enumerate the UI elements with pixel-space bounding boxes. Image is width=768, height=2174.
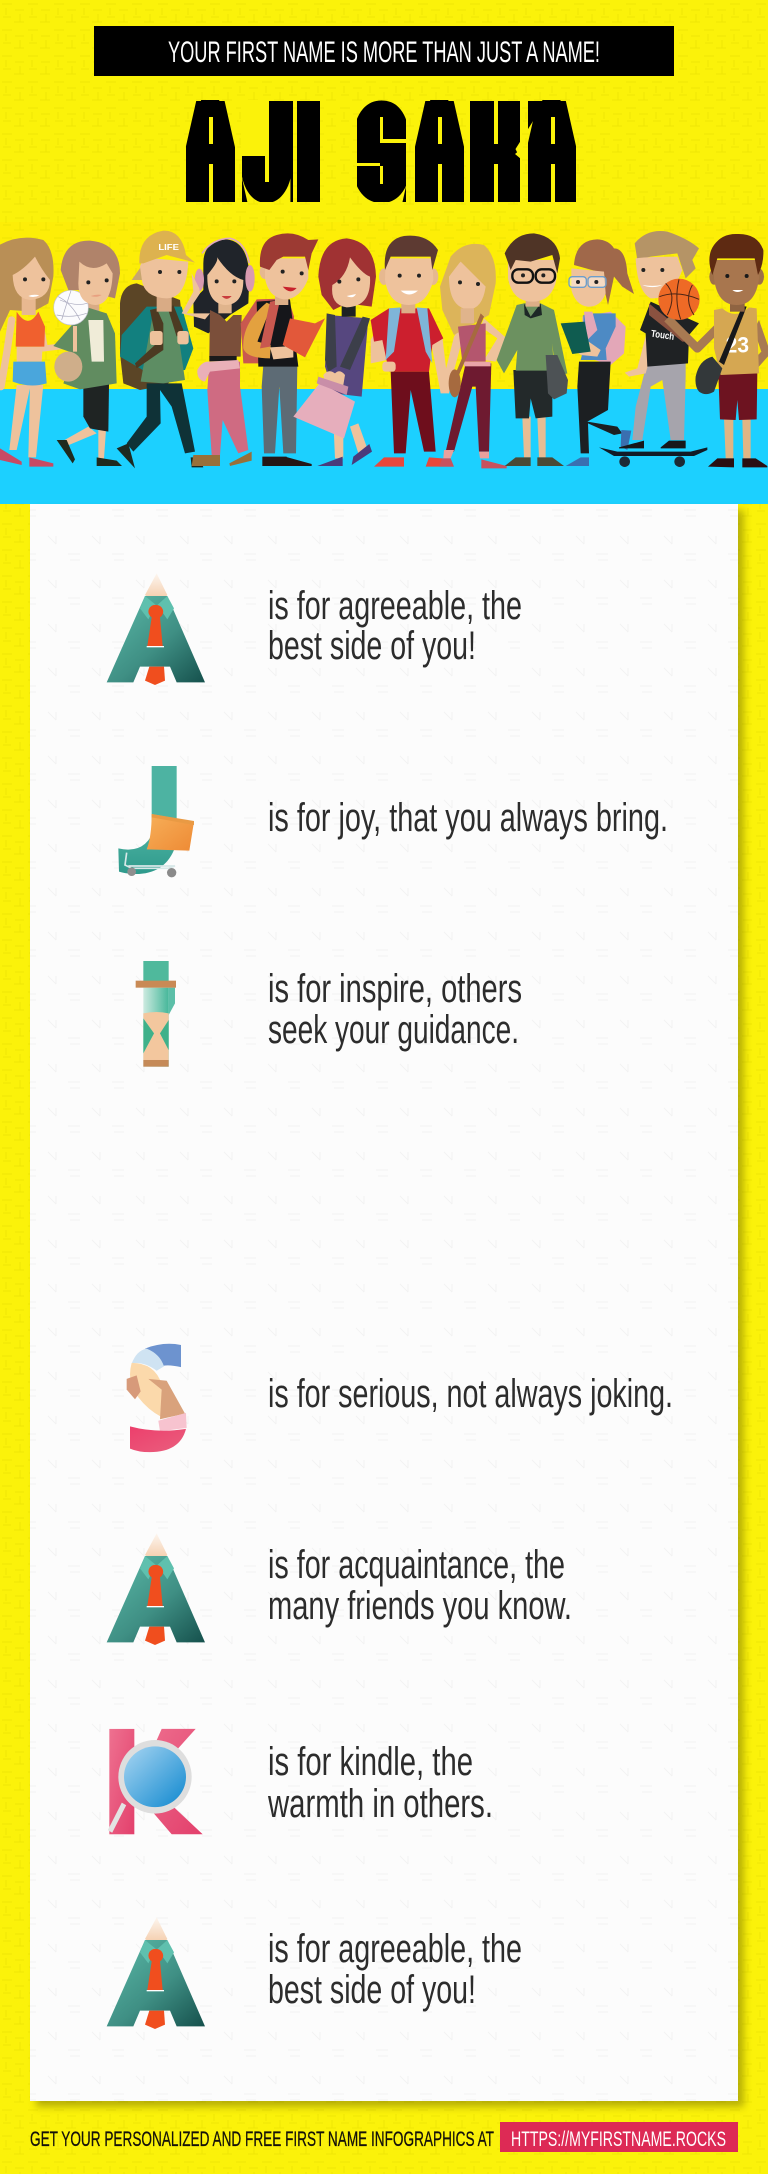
text: acquaintance: is for acquaintance, the xyxy=(268,1543,565,1587)
person: boy in yellow jersey: 23 xyxy=(726,333,749,358)
person: boy with glasses xyxy=(497,233,568,466)
text: kindle: warmth in others. xyxy=(267,1782,493,1826)
person: boy on skateboard with basketball xyxy=(599,231,722,467)
icon: letter J shopping cart xyxy=(118,766,194,877)
text: inspire: seek your guidance. xyxy=(268,1008,519,1052)
footer link badge xyxy=(500,2122,738,2152)
left six characters xyxy=(0,231,376,468)
person: girl with ponytail and tablet xyxy=(561,239,634,466)
person: boy with book xyxy=(241,233,325,466)
row: letter A agreeable xyxy=(107,573,522,685)
icon: letter A pencil and tie xyxy=(107,573,205,685)
icon: letter A pencil and tie xyxy=(107,1533,205,1645)
row: letter K kindle xyxy=(109,1729,493,1834)
text: inspire xyxy=(268,967,522,1052)
person: hiker with backpack and cap xyxy=(117,231,203,468)
icon: letter S handshake xyxy=(127,1344,187,1452)
row: letter J joy xyxy=(118,766,668,877)
person: hiker with backpack and cap: LIFE xyxy=(158,243,180,252)
person: boy in yellow jersey xyxy=(695,234,768,467)
text: agreeable: best side of you! xyxy=(268,624,476,668)
text: agreeable: is for agreeable, the xyxy=(268,584,522,628)
text: inspire: is for inspire, others xyxy=(268,967,522,1011)
person: girl with headphones xyxy=(182,238,255,466)
text: agreeable: is for agreeable, the xyxy=(268,1927,522,1971)
row: letter S serious xyxy=(127,1344,673,1452)
footer xyxy=(30,2122,738,2152)
text: acquaintance: many friends you know. xyxy=(268,1584,572,1628)
title: name: AJI SAKA xyxy=(193,108,570,197)
text: kindle: is for kindle, the xyxy=(268,1740,473,1784)
person: girl with volleyball xyxy=(53,241,122,466)
person: boy on skateboard with basketball: Touch xyxy=(650,329,675,343)
icon: letter K magnifier xyxy=(109,1729,203,1834)
text: agreeable xyxy=(268,584,522,668)
text: acquaintance xyxy=(268,1543,572,1628)
text: kindle xyxy=(267,1740,493,1826)
text: agreeable xyxy=(268,1927,522,2012)
text: agreeable: best side of you! xyxy=(268,1968,476,2012)
icon: letter A pencil and tie xyxy=(107,1917,205,2029)
person: blonde girl xyxy=(439,244,507,468)
right six characters xyxy=(371,231,768,468)
person: boy in red shirt xyxy=(371,236,453,467)
row: letter A acquaintance xyxy=(107,1533,572,1645)
white content panel xyxy=(30,504,744,2107)
banner: students on blue strip xyxy=(0,231,768,504)
person: girl in orange top xyxy=(0,238,72,467)
header bar with tagline xyxy=(94,26,674,76)
footer call to action: GET YOUR PERSONALIZED AND FREE FIRST NAME INFOGRAPHICS AT xyxy=(30,2128,494,2151)
row: letter A agreeable repeat xyxy=(107,1917,522,2029)
person: girl with pink bag xyxy=(293,238,376,466)
icon: letter I hourglass xyxy=(136,961,176,1067)
row: letter I inspire xyxy=(136,961,522,1067)
